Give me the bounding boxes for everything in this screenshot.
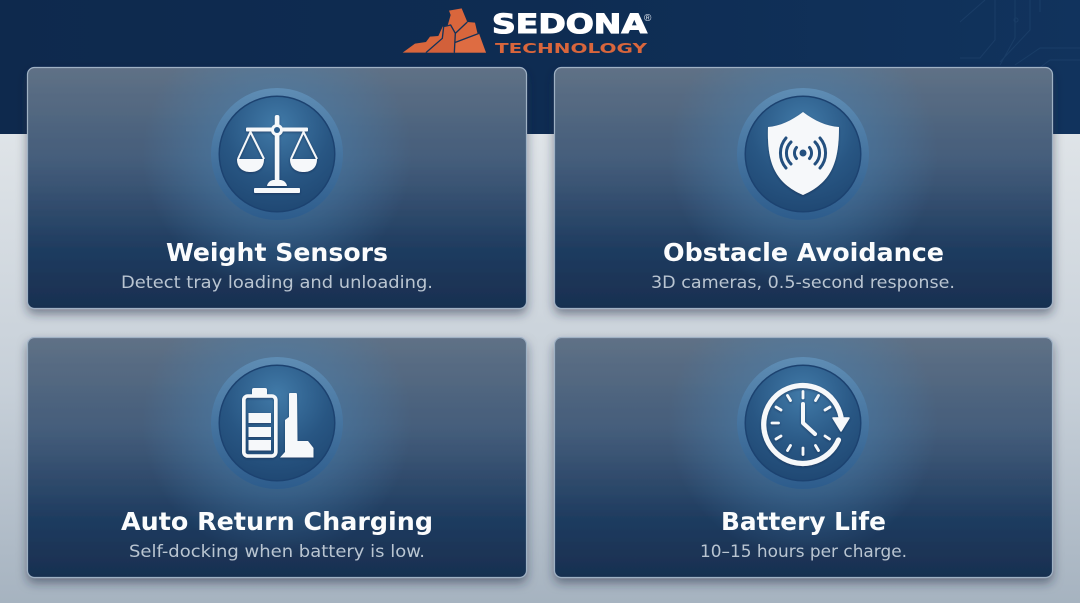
heading: Auto Return Charging (121, 507, 433, 536)
panel: obstacle avoidance (554, 19, 1052, 308)
icon: clock with arrow (737, 357, 869, 489)
description: Detect tray loading and unloading. (121, 273, 433, 293)
description: 10–15 hours per charge. (700, 542, 907, 562)
panel: battery life (554, 288, 1052, 578)
page background (0, 134, 1080, 603)
heading: Battery Life (721, 507, 886, 536)
card background (28, 68, 526, 308)
panel: auto return charging (28, 288, 526, 578)
header band (0, 0, 1080, 134)
icon: shield with signal (737, 88, 869, 220)
heading: Obstacle Avoidance (663, 238, 944, 267)
icon: scales (211, 88, 343, 220)
card background (28, 338, 526, 578)
logo wordmark: TECHNOLOGY: TECHNOLOGY (495, 42, 648, 57)
logo mark: red rocks (403, 8, 486, 53)
logo wordmark: SEDONA: SEDONA (492, 9, 647, 40)
heading: Weight Sensors (166, 238, 388, 267)
logo registered mark: ® (644, 13, 652, 24)
description: 3D cameras, 0.5-second response. (651, 273, 955, 293)
icon: battery and dock (211, 357, 343, 489)
description: Self-docking when battery is low. (129, 542, 425, 562)
logo (403, 8, 652, 57)
card background (554, 338, 1052, 578)
panel: weight sensors (28, 19, 526, 308)
card background (554, 68, 1052, 308)
